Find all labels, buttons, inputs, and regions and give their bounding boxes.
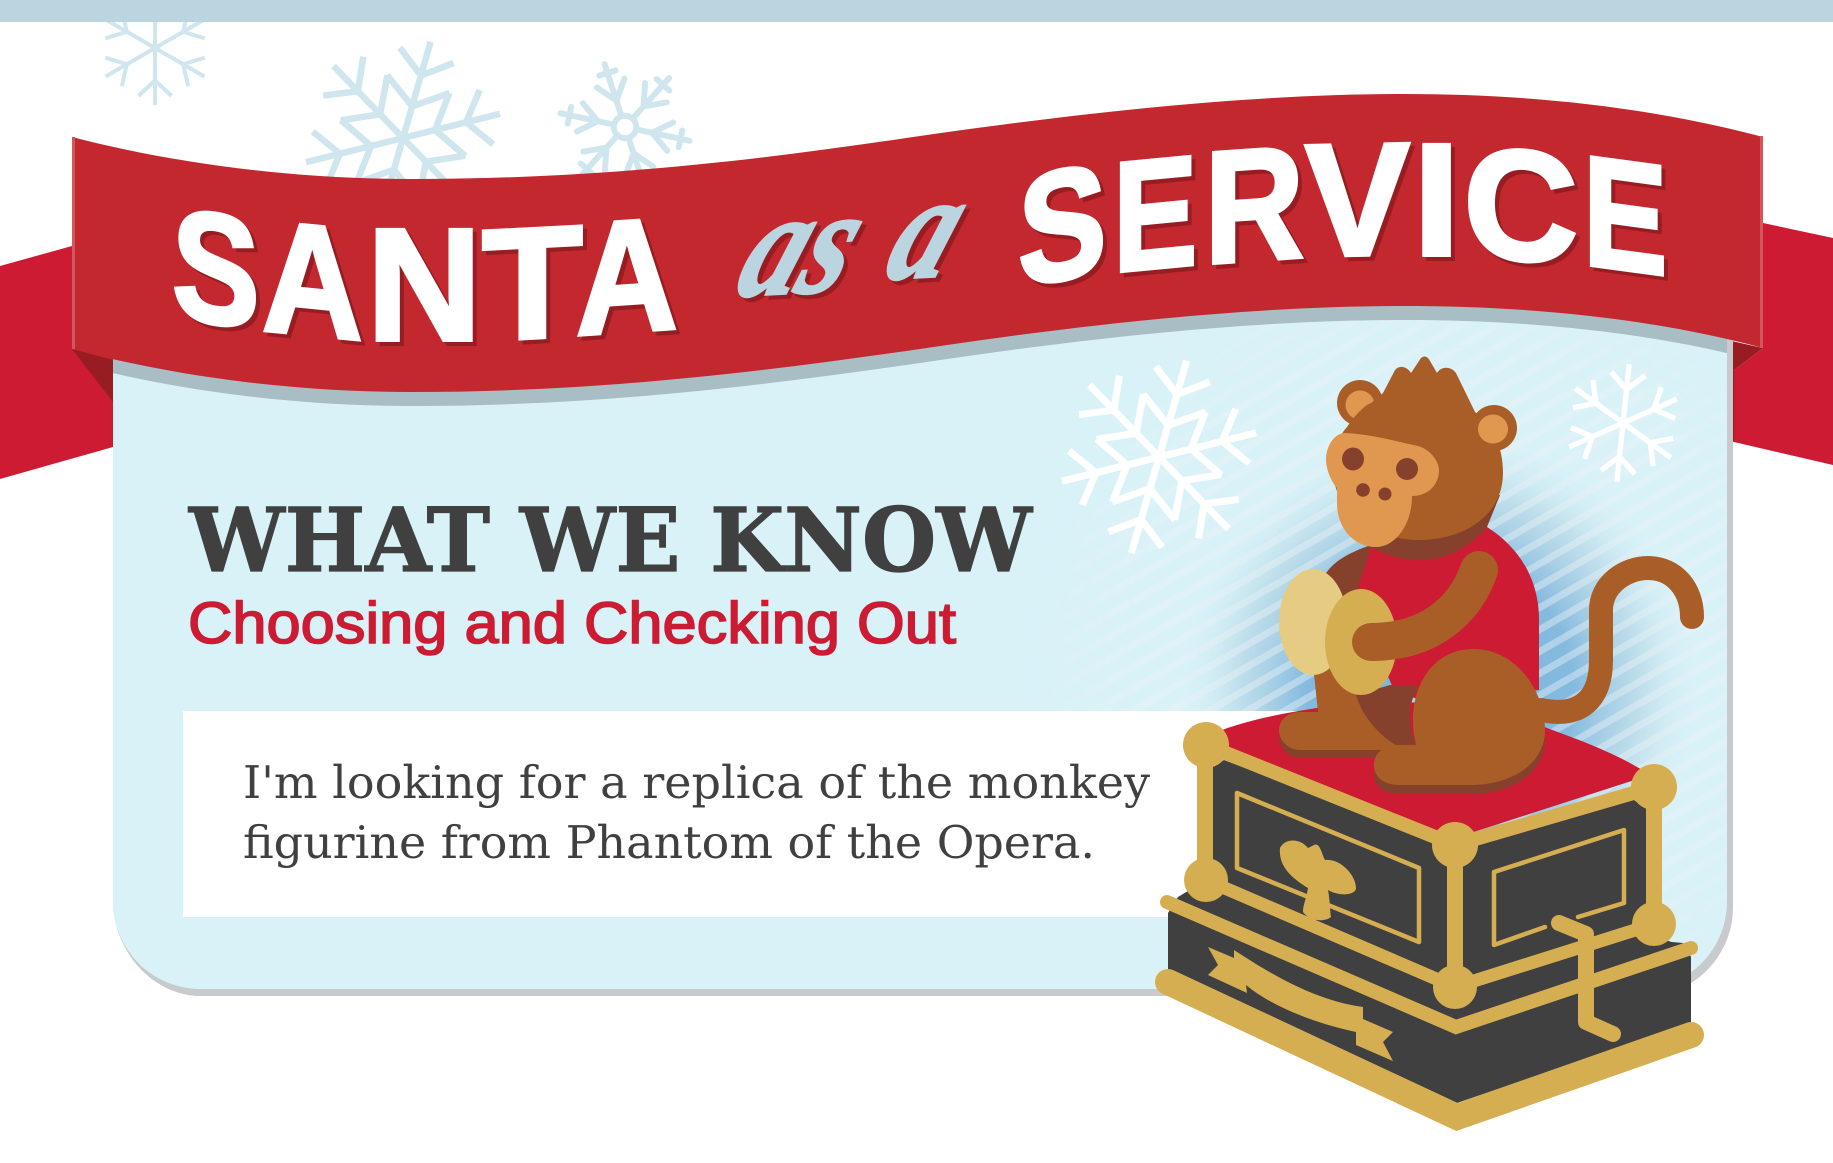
- banner: [72, 94, 1763, 392]
- quote text: [243, 756, 1151, 869]
- snowflake: white large: [1033, 333, 1285, 581]
- title word: SERVICE: E: [1583, 124, 1667, 309]
- title word: SANTA: [172, 174, 678, 375]
- snowflake: white small: [1558, 358, 1688, 488]
- shirt: [1354, 527, 1539, 700]
- top bar: [0, 0, 1833, 22]
- gold trim: [1167, 745, 1691, 1117]
- subheading: choosing and checking out: Choosing and Checking Out: [188, 591, 956, 656]
- music box pedestal: [1167, 702, 1691, 1117]
- collar shadow: [1365, 495, 1500, 560]
- cymbal: back: [1279, 569, 1347, 675]
- heading: what we know: WHAT WE KNOW: [188, 488, 1033, 592]
- title word: SANTA: N: [367, 195, 481, 374]
- quote box: [183, 711, 1303, 917]
- title word: SERVICE: R: [1204, 112, 1304, 298]
- upper box: [1178, 760, 1680, 1040]
- snowflake: top left: [97, 0, 213, 105]
- quote text: I'm looking for a replica of the monkey: [243, 756, 1151, 809]
- eye: left: [1342, 448, 1364, 470]
- title word: SERVICE: S: [1018, 130, 1107, 320]
- haunch shadow: [1374, 658, 1545, 794]
- title word: SERVICE: E: [1113, 123, 1197, 306]
- face: [1326, 433, 1439, 547]
- title words: as a: a: [869, 143, 992, 312]
- title word: SERVICE: C: [1464, 114, 1578, 297]
- ear: right: [1471, 405, 1517, 451]
- snowflake: ringed above banner: [543, 44, 707, 210]
- back arm shadow: [1325, 545, 1375, 610]
- lower box: [1168, 897, 1691, 1103]
- title: [172, 109, 1667, 375]
- ribbon tail: right: [1727, 223, 1833, 465]
- haunch: [1374, 649, 1545, 785]
- head and hair: [1333, 356, 1503, 540]
- title words: as a: as: [720, 157, 889, 329]
- snowflake: large above banner: [277, 14, 529, 262]
- title word: SANTA: T: [482, 193, 583, 375]
- panel: what we know: [113, 200, 1733, 996]
- tail: [1541, 568, 1692, 712]
- title words: as a: [720, 143, 992, 329]
- banner shadow: [113, 306, 1727, 406]
- cushion: [1222, 702, 1650, 838]
- arm: [1371, 570, 1479, 642]
- monkey figurine: [1279, 356, 1692, 794]
- title word: SERVICE: V: [1305, 109, 1410, 290]
- cymbal: front: [1325, 589, 1397, 695]
- title word: SANTA: S: [172, 174, 260, 363]
- nostril: right: [1378, 488, 1392, 500]
- lower torso and front leg shadow: [1279, 720, 1380, 758]
- background glow with stripes: [1211, 470, 1670, 832]
- title word: SERVICE: [1018, 109, 1667, 320]
- eye: right: [1396, 458, 1418, 480]
- icon: ribbon plaque: [1208, 947, 1393, 1061]
- lower torso and front leg: [1279, 665, 1405, 750]
- quote text: figurine from Phantom of the Opera.: [243, 816, 1095, 869]
- title word: SERVICE: I: [1413, 110, 1460, 289]
- corner knobs: [1183, 722, 1677, 1009]
- title word: SANTA: A: [262, 187, 363, 374]
- belly shadow: [1356, 685, 1420, 745]
- nostril: left: [1356, 483, 1370, 497]
- icon: crest: [1280, 840, 1356, 920]
- title word: SANTA: A: [576, 183, 678, 369]
- ear: left: [1337, 380, 1383, 426]
- ribbon tail: left: [0, 246, 113, 479]
